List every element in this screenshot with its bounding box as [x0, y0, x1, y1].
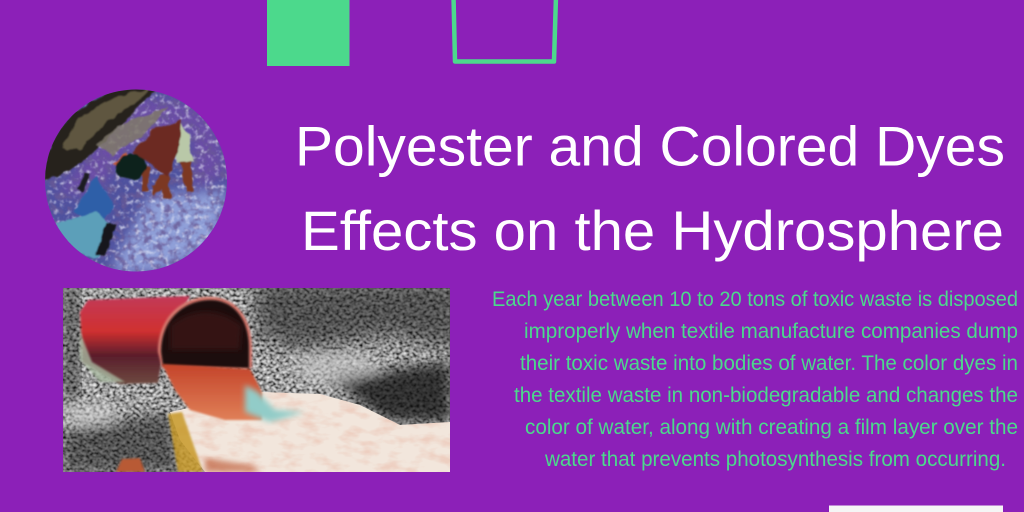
turquoise streak: [245, 385, 305, 422]
blue pool: [72, 176, 115, 218]
teal slab: [55, 212, 111, 258]
body text: improperly when textile manufacture companies dump: [524, 320, 1018, 343]
decorative green outlined frame: [454, 0, 556, 62]
black slabs: [96, 222, 116, 257]
pipe mouth: [158, 297, 252, 368]
body text: water that prevents photosynthesis from occurring.: [544, 448, 1006, 471]
decorative green square: [267, 0, 350, 66]
white box at bottom edge: [829, 506, 1003, 512]
arms: [142, 165, 149, 191]
orange rock: [116, 458, 145, 472]
body text: [492, 288, 1018, 471]
orange sleeve detail: [113, 152, 127, 167]
body text: their toxic waste into bodies of water. The color dyes in: [520, 352, 1018, 375]
photo: red pipe discharging dye waste: [63, 280, 460, 476]
dark rock: [45, 90, 156, 181]
shirt: [132, 120, 181, 176]
pipe body: [80, 296, 190, 384]
shorts: [174, 121, 193, 164]
title: Polyester and Colored Dyes: [295, 114, 1005, 178]
body text: the textile waste in non-biodegradable and changes the: [514, 384, 1018, 407]
title: Effects on the Hydrosphere: [301, 199, 1004, 262]
foam water: [170, 392, 450, 472]
title: [295, 114, 1005, 262]
photo: worker in dye-polluted water: [40, 85, 227, 272]
purple upper debris: [55, 95, 227, 195]
dark grass patches: [255, 280, 460, 350]
orange dye flow: [162, 364, 262, 420]
legs: [179, 161, 195, 193]
pale water lower right: [110, 190, 227, 272]
body text: color of water, along with creating a film layer over the: [525, 416, 1018, 439]
head: [116, 154, 146, 180]
yellow reeds: [168, 412, 203, 472]
pale grass patches: [295, 350, 390, 388]
